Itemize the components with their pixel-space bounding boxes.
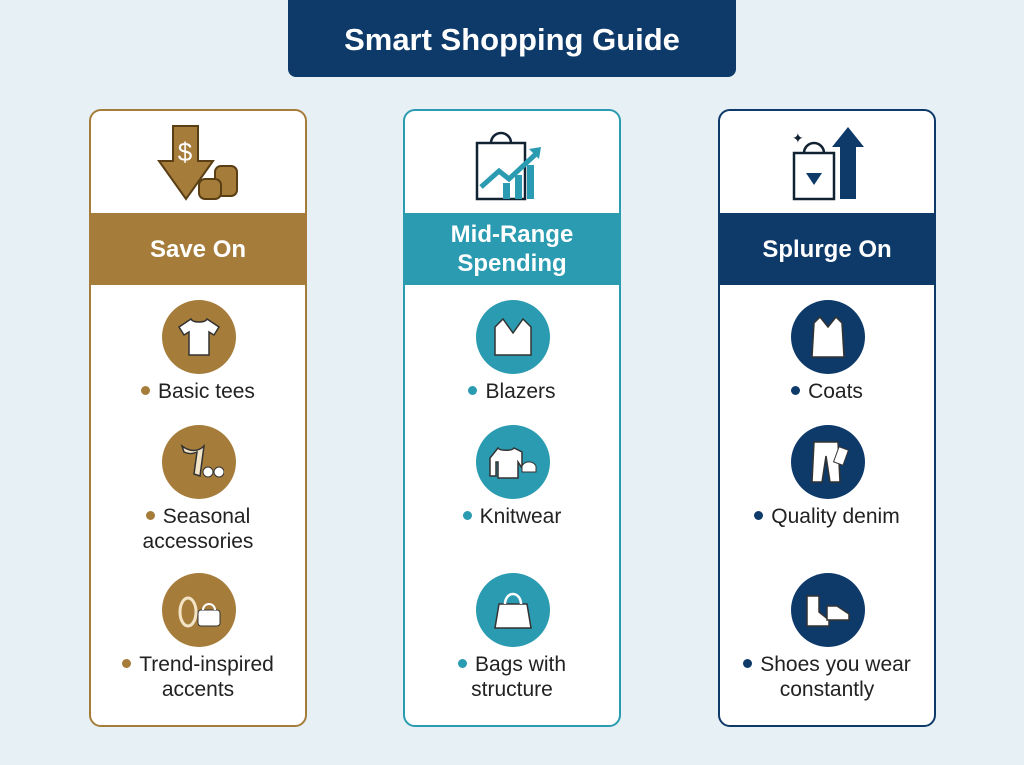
panel: mid-range: Knitwear xyxy=(480,505,561,528)
header: splurge on: Splurge On xyxy=(762,236,892,262)
panel: mid-range xyxy=(403,109,621,727)
item: trend-inspired accents xyxy=(122,573,274,701)
item: seasonal accessories xyxy=(143,425,253,553)
header: splurge on xyxy=(720,213,934,285)
icon: money down: $ xyxy=(178,137,193,167)
header: mid-range spending: Spending xyxy=(457,250,567,277)
item: quality denim xyxy=(754,425,900,528)
header: mid-range spending: Mid-Range xyxy=(451,221,573,248)
item: knitwear xyxy=(463,425,562,528)
panel: save on xyxy=(89,109,307,727)
title xyxy=(288,0,736,77)
panel: save on: Basic tees xyxy=(158,380,255,403)
panel: splurge on xyxy=(718,109,936,727)
title: Smart Shopping Guide xyxy=(344,22,680,57)
icon: bag with arrow xyxy=(792,127,864,200)
panel: save on: Trend-inspired xyxy=(139,653,274,676)
panel: splurge on: constantly xyxy=(780,678,874,701)
item: coats xyxy=(791,300,865,403)
item: basic tees xyxy=(141,300,255,403)
panel: mid-range: Bags with xyxy=(475,653,566,676)
panel: mid-range: Blazers xyxy=(485,380,556,403)
icon: bag chart xyxy=(476,132,541,200)
icon: money down xyxy=(157,125,238,201)
icon: bag with arrow: ✦ xyxy=(792,130,804,146)
panel: splurge on: Quality denim xyxy=(771,505,900,528)
item: bags with structure xyxy=(458,573,566,701)
header: mid-range spending xyxy=(405,213,619,285)
panel: splurge on: Coats xyxy=(808,380,863,403)
panel: splurge on: Shoes you wear xyxy=(760,653,911,676)
panel: mid-range: structure xyxy=(471,678,553,701)
panel: save on: Seasonal xyxy=(163,505,250,528)
header: save on: Save On xyxy=(150,236,246,262)
header: save on xyxy=(91,213,305,285)
panel: save on: accents xyxy=(162,678,234,701)
item: shoes xyxy=(743,573,911,701)
item: blazers xyxy=(468,300,556,403)
panel: save on: accessories xyxy=(143,530,253,553)
